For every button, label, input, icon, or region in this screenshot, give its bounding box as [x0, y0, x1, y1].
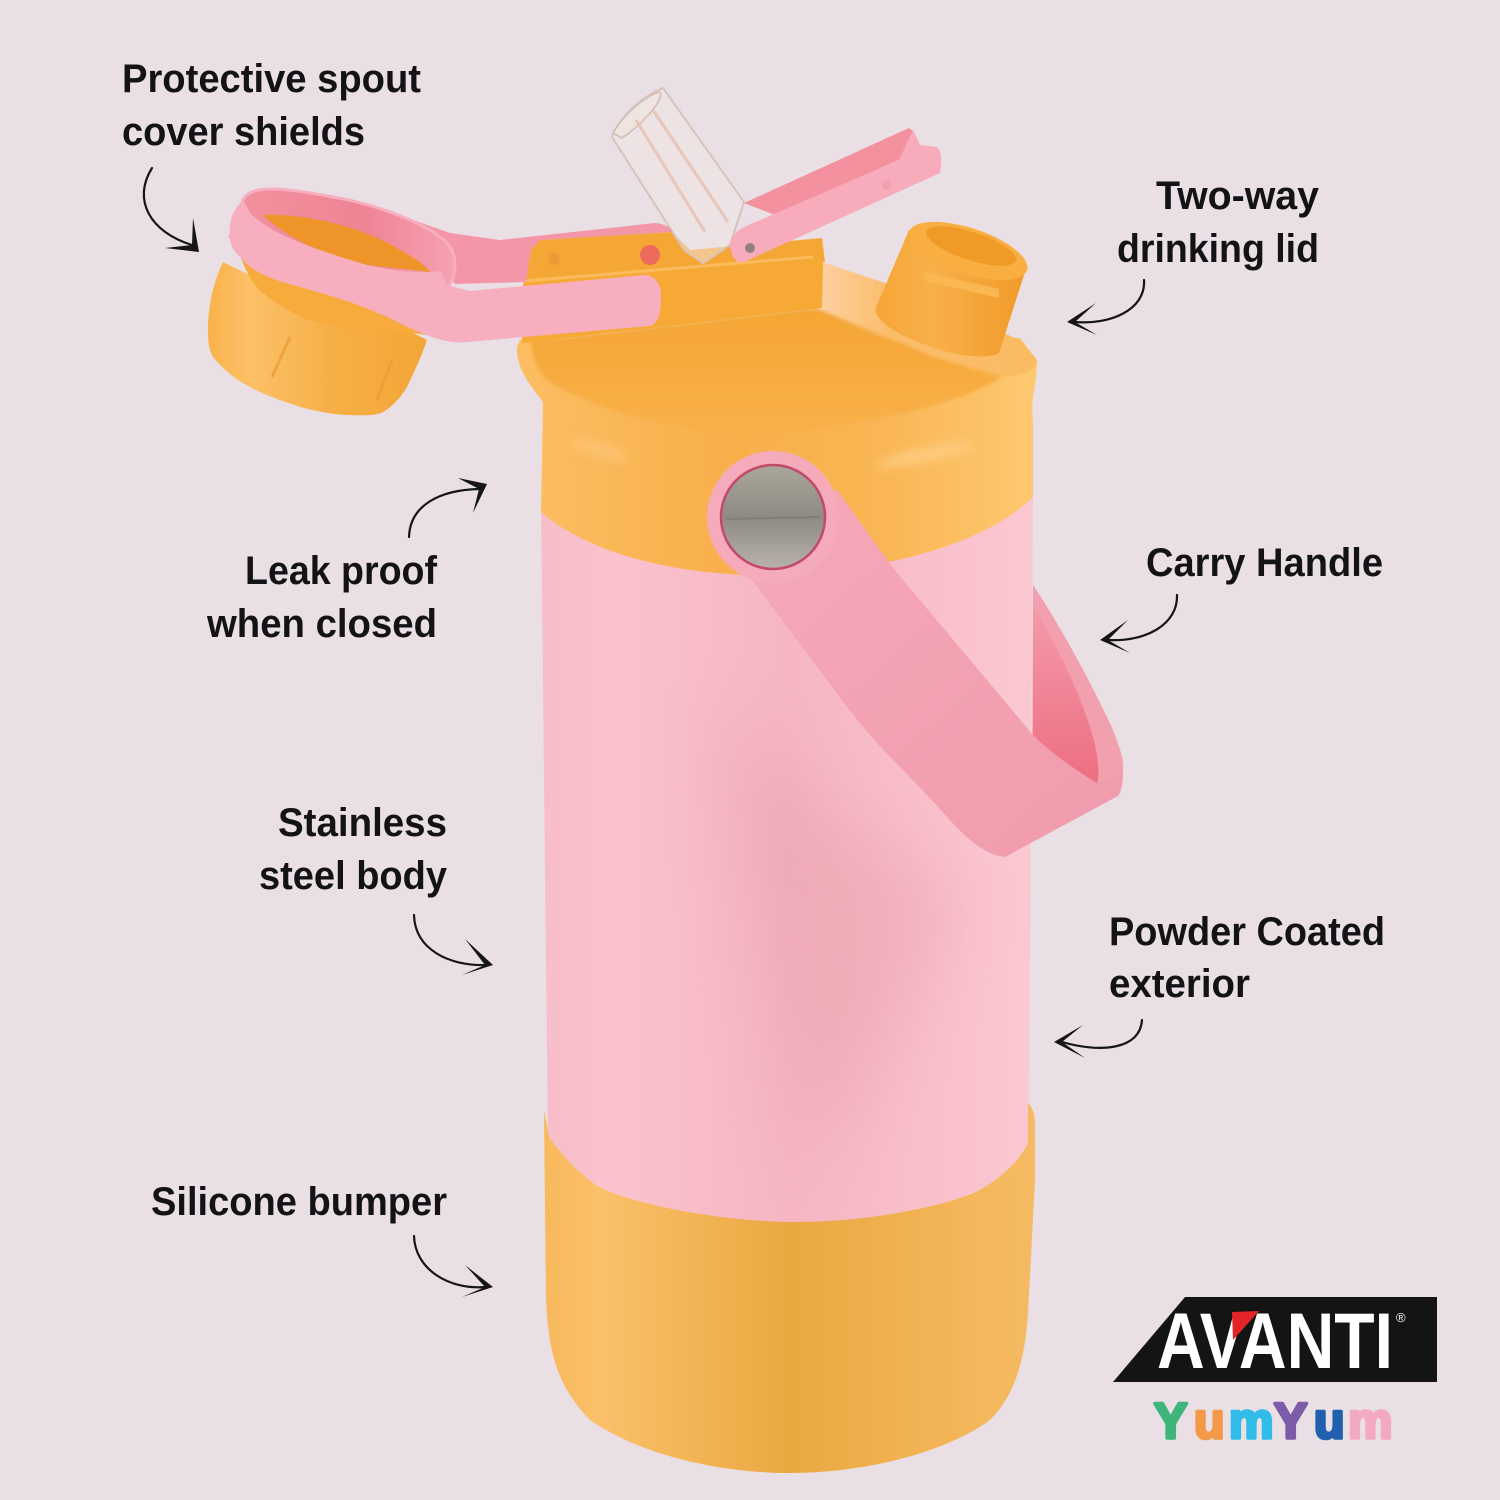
label: stainless steel: Stainless — [278, 801, 447, 845]
label: carry handle: Carry Handle — [1146, 541, 1383, 585]
flap inner trough — [744, 128, 913, 215]
silicone bumper — [544, 1103, 1035, 1473]
spout body — [875, 230, 1024, 356]
logo registered mark: ® — [1396, 1310, 1406, 1325]
cap ridges — [272, 337, 392, 400]
lid top plane — [531, 308, 1002, 433]
bottle body — [541, 490, 1033, 1230]
cap skirt — [208, 262, 427, 415]
label: protective spout: Protective spout — [122, 57, 421, 101]
cap arm front and ring band — [230, 200, 661, 342]
label: two-way lid: drinking lid — [1117, 227, 1319, 271]
straw inner lines — [636, 110, 728, 232]
logo: YumYum: u — [1194, 1393, 1225, 1449]
highlight left — [569, 434, 631, 466]
straw — [612, 88, 744, 263]
pin highlight — [726, 517, 820, 519]
collar highlights — [569, 434, 975, 472]
slot dot red — [640, 245, 660, 265]
cap neck — [240, 250, 427, 335]
product: drink bottle — [208, 88, 1123, 1473]
logo: Avanti — [1113, 1296, 1437, 1385]
label: protective spout — [122, 57, 421, 154]
logo: YumYum: m — [1348, 1393, 1392, 1449]
arrow: protective spout — [144, 168, 199, 252]
handle pin mount — [707, 451, 839, 583]
spout tab — [923, 272, 999, 298]
label: leak proof — [206, 549, 438, 646]
cap inner orange — [263, 215, 430, 272]
logo wordmark: AVANTI — [1157, 1296, 1393, 1385]
logo: YumYum: Y — [1274, 1393, 1307, 1449]
logo: YumYum: m — [1229, 1393, 1273, 1449]
carry handle back loop — [1032, 585, 1123, 796]
handle inner shaded area — [1033, 606, 1098, 783]
label: powder coated — [1109, 910, 1385, 1006]
logo: YumYum: u — [1314, 1393, 1345, 1449]
arrow: two-way lid — [1067, 280, 1144, 335]
label: silicone bumper: Silicone bumper — [151, 1180, 447, 1224]
spout cover cap — [208, 250, 427, 415]
flap arm — [730, 130, 941, 262]
highlight right — [875, 438, 975, 472]
carry handle strap — [720, 490, 1123, 857]
spout opening — [922, 218, 1020, 274]
logo black banner — [1113, 1297, 1437, 1382]
label: two-way lid — [1117, 174, 1320, 271]
label: leak proof: when closed — [206, 602, 437, 646]
label: powder coated: Powder Coated — [1109, 910, 1385, 954]
label: stainless steel: steel body — [259, 854, 448, 898]
lid front raised block — [522, 257, 823, 343]
arrow: carry handle — [1100, 595, 1177, 653]
handle shadow on body — [744, 788, 934, 1098]
spout — [875, 210, 1034, 356]
label: powder coated: exterior — [1109, 962, 1250, 1006]
cap ring back wall — [230, 189, 455, 290]
flap pin — [745, 243, 755, 253]
handle pin head — [721, 465, 825, 569]
logo red triangle — [1232, 1311, 1259, 1340]
cap arm back — [413, 220, 672, 284]
front block top lip — [524, 257, 813, 281]
arrow: leak proof — [409, 478, 487, 537]
arrow: silicone bumper — [414, 1236, 493, 1297]
arrow: stainless steel — [414, 915, 493, 975]
slot dot small — [548, 253, 560, 265]
ridge toward spout — [822, 262, 1037, 377]
straw tube — [612, 88, 744, 263]
logo: YumYum: Y — [1154, 1393, 1187, 1449]
straw flap — [730, 128, 941, 262]
label: protective spout: cover shields — [122, 110, 365, 154]
spout top rim — [902, 210, 1034, 292]
label: stainless steel — [259, 801, 448, 898]
straw opening — [613, 92, 661, 138]
slot back wall — [524, 232, 825, 284]
label: two-way lid: Two-way — [1156, 174, 1320, 218]
label: leak proof: Leak proof — [245, 549, 438, 593]
flap dot — [882, 180, 892, 190]
arrow: powder coated — [1054, 1020, 1142, 1058]
lid collar — [517, 338, 1037, 575]
